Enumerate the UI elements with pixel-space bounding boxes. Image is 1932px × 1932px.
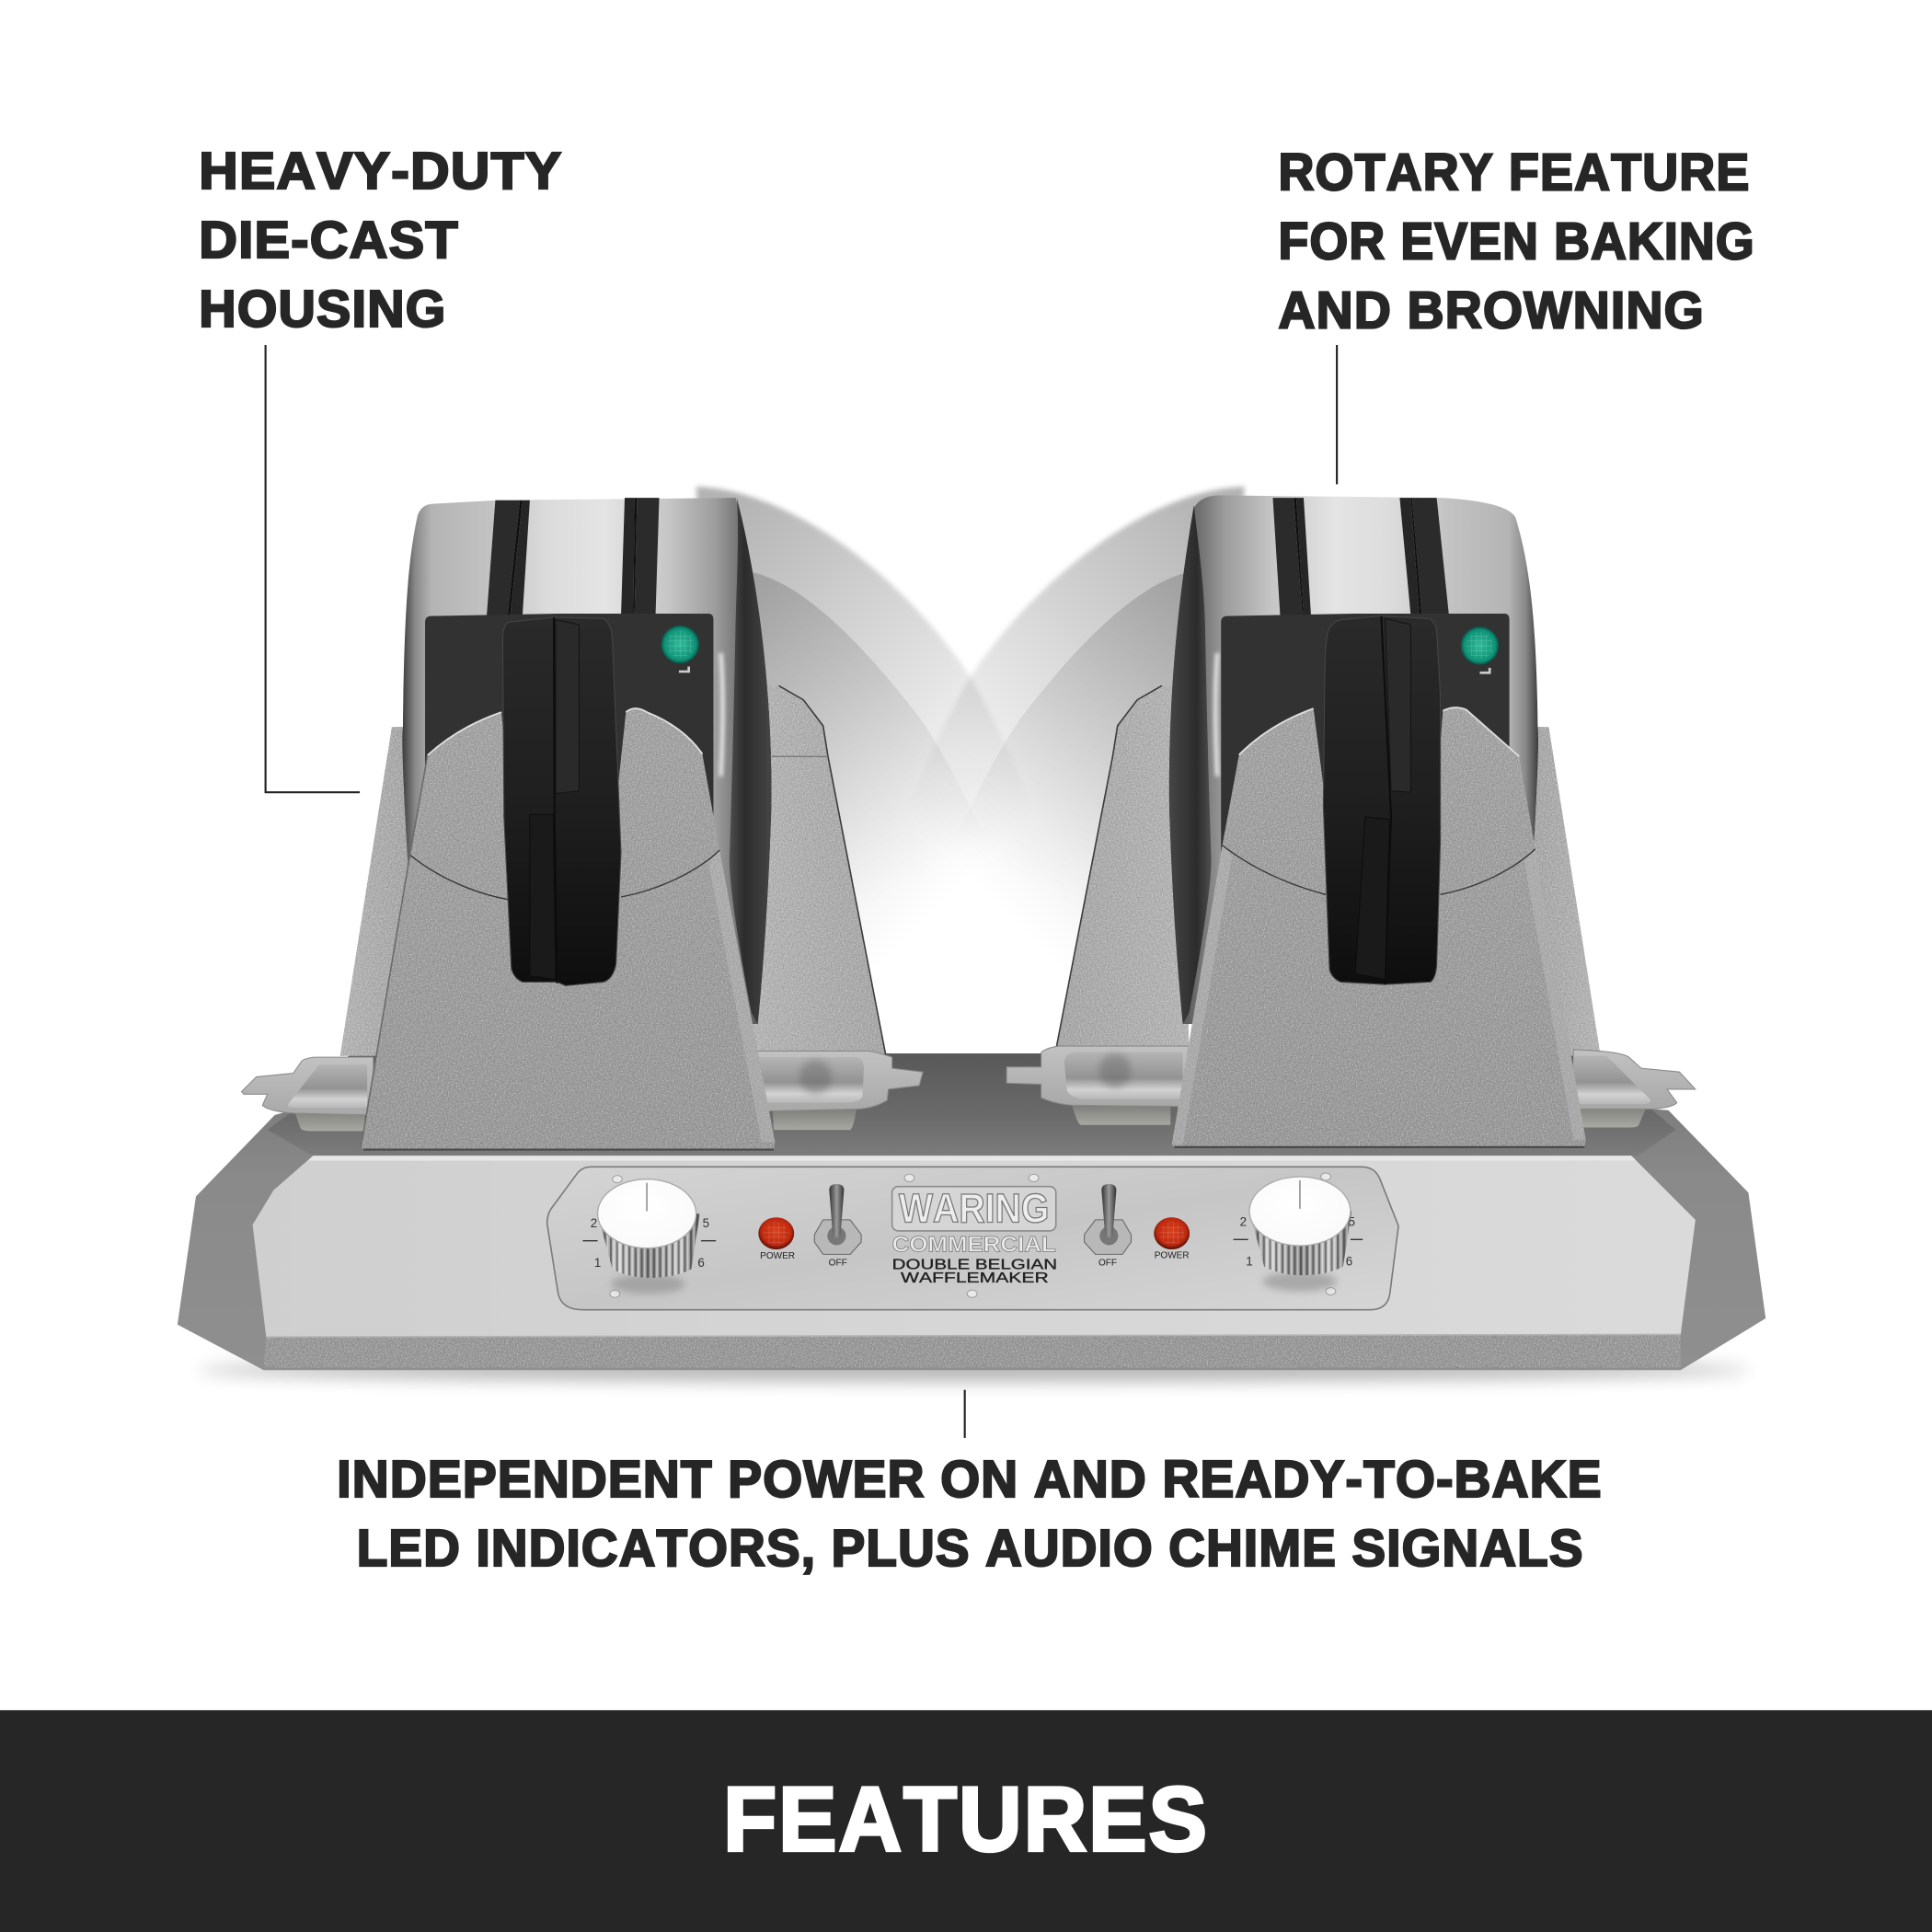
callout: LED indicators and audio chime: [337, 1450, 1603, 1577]
footer title: FEATURES: [723, 1769, 1209, 1871]
left power light: [758, 1217, 795, 1261]
callout: LED indicators and audio chime: INDEPENDENT POWER ON AND READY-TO-BAKE: [337, 1450, 1603, 1508]
handle: [502, 617, 621, 985]
control panel with ready LED: [425, 614, 713, 863]
drip tray left: [241, 1057, 374, 1131]
right dial: 1: [1246, 1254, 1253, 1268]
waffle drum right: [1169, 495, 1538, 1024]
base shadow: [197, 1359, 1750, 1381]
callout: heavy-duty die-cast housing: DIE-CAST: [199, 211, 459, 269]
rotary motion blur, right: [893, 487, 1245, 985]
model name: WAFFLEMAKER: [901, 1271, 1049, 1286]
plate screws: [610, 1173, 1336, 1297]
callout: rotary feature: AND BROWNING: [1279, 281, 1705, 339]
left power light: POWER: [760, 1251, 795, 1261]
product: double belgian wafflemaker: [178, 487, 1765, 1381]
front unit, right: [1172, 614, 1586, 1147]
leader line: rotary feature: [1336, 345, 1338, 484]
callout: heavy-duty die-cast housing: HOUSING: [199, 280, 446, 338]
waffle drum left: [402, 498, 771, 1024]
right power light: POWER: [1155, 1250, 1190, 1260]
back parts, left unit: [241, 498, 923, 1131]
base body: [178, 1053, 1765, 1370]
leader line: indicators: [964, 1390, 966, 1438]
right dial: 2: [1240, 1215, 1247, 1229]
left dial: 1: [594, 1256, 601, 1270]
front unit, left: [361, 614, 775, 1150]
right dial: 6: [1346, 1254, 1352, 1268]
drip tray right: [752, 1051, 923, 1130]
back parts, right unit: [1006, 495, 1696, 1127]
model name: DOUBLE BELGIAN: [892, 1257, 1057, 1272]
right power light: [1154, 1217, 1190, 1260]
rear housing outer: [1532, 727, 1601, 1056]
callout: heavy-duty die-cast housing: [199, 142, 562, 338]
drip tray outer: [1573, 1050, 1696, 1127]
rear housing inner: [1054, 685, 1189, 1056]
handle: [1323, 616, 1441, 984]
right dial: [1234, 1177, 1363, 1292]
control panel with ready LED: [1221, 614, 1510, 863]
left toggle switch: [814, 1184, 861, 1268]
right toggle switch: [1085, 1184, 1131, 1268]
footer band: [0, 1710, 1932, 1932]
waring commercial logo: COMMERCIAL: [892, 1233, 1056, 1258]
left dial: 6: [697, 1256, 705, 1270]
rear housing right: [752, 685, 886, 1056]
waring commercial logo: WARING: [899, 1187, 1049, 1232]
model name: [892, 1257, 1057, 1286]
callout: LED indicators and audio chime: LED INDICATORS, PLUS AUDIO CHIME SIGNALS: [357, 1519, 1584, 1577]
callout: rotary feature: FOR EVEN BAKING: [1279, 212, 1755, 270]
leader line: housing: [266, 345, 360, 792]
right toggle switch: OFF: [1098, 1258, 1117, 1268]
rear housing outline: [778, 685, 886, 1056]
left dial: [582, 1179, 716, 1294]
callout: rotary feature: [1279, 143, 1755, 339]
drip tray inner: [1006, 1046, 1189, 1125]
front housing: [361, 708, 775, 1150]
left toggle switch: OFF: [829, 1258, 847, 1268]
front housing: [1172, 707, 1586, 1147]
right dial: 5: [1348, 1215, 1355, 1229]
left dial: 5: [703, 1216, 709, 1230]
rear housing left: [340, 727, 409, 1056]
rear housing outline: [1054, 685, 1162, 1056]
rear housing seam: [770, 755, 828, 757]
callout: rotary feature: ROTARY FEATURE: [1279, 143, 1750, 201]
rotary motion blur, left: [696, 487, 1047, 985]
callout: heavy-duty die-cast housing: HEAVY-DUTY: [199, 142, 562, 200]
left dial: 2: [591, 1216, 597, 1230]
waring commercial logo: [892, 1187, 1056, 1258]
control plate: [547, 1167, 1398, 1310]
